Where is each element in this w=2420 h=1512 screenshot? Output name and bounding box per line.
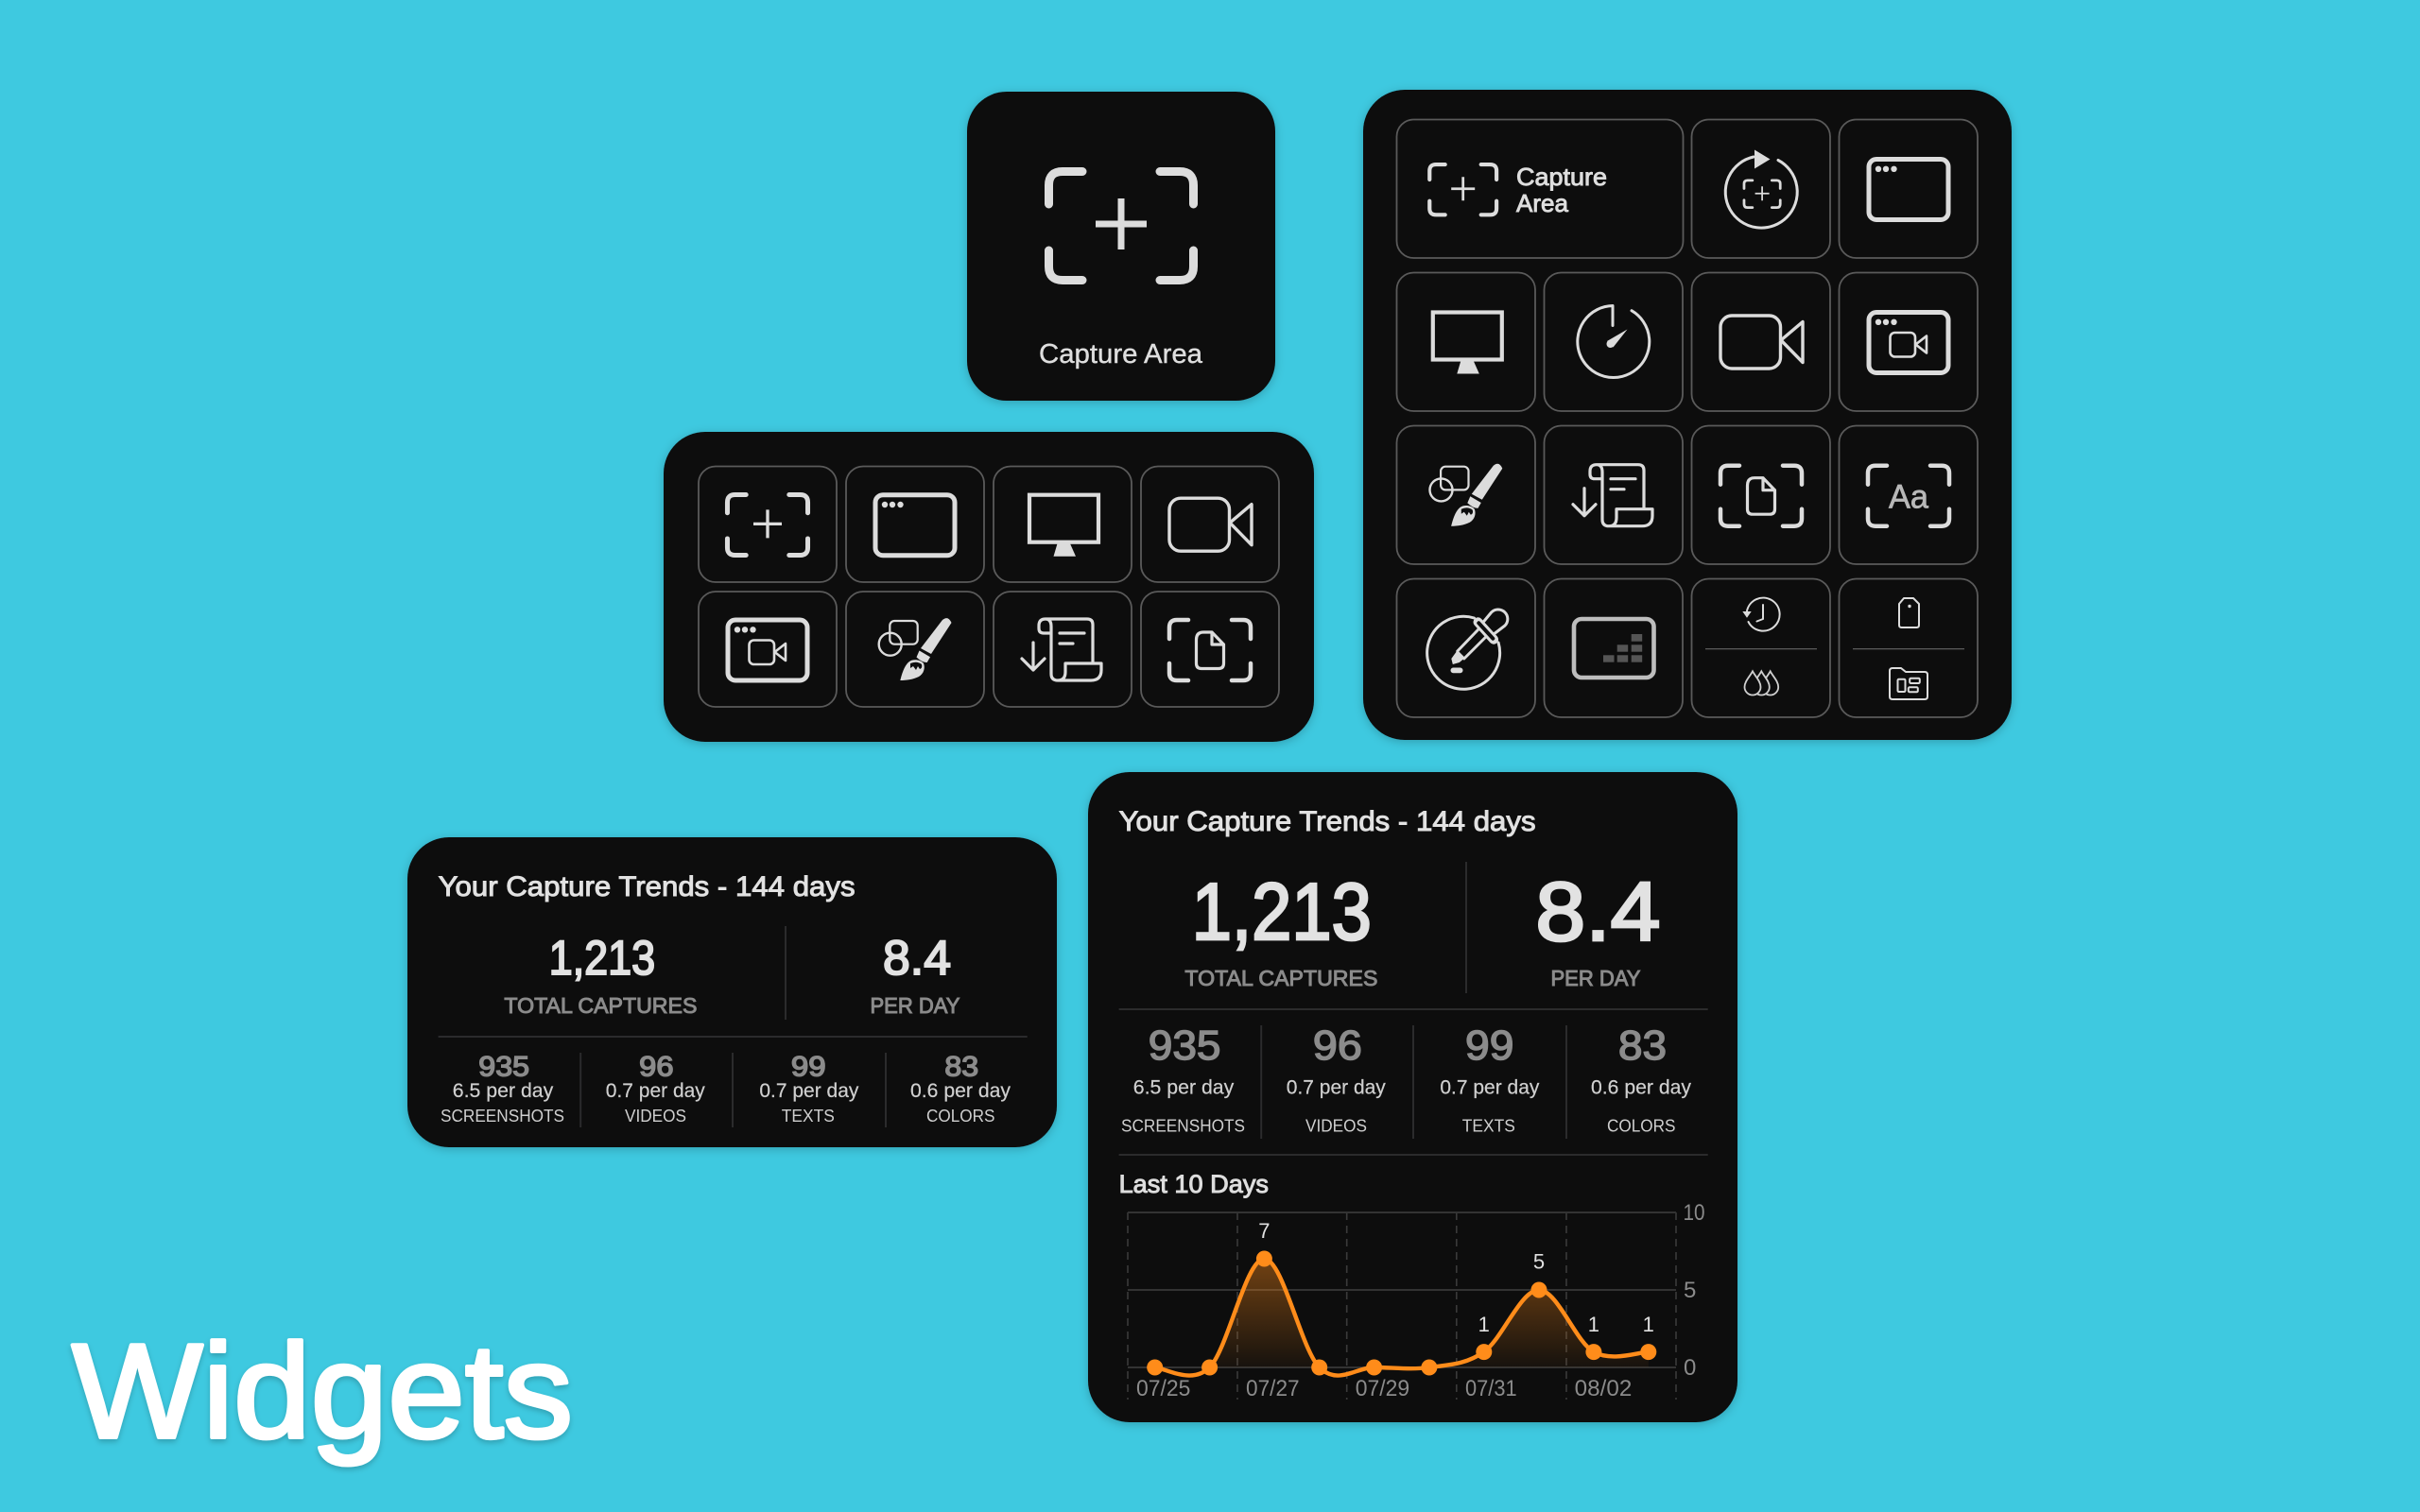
stat: videos: VIDEOS (1305, 1117, 1367, 1136)
panel background (1088, 772, 1737, 1422)
button: color picker (1397, 578, 1535, 717)
line chart: last 10 days (1128, 1200, 1705, 1401)
stat: per day: PER DAY (1550, 966, 1641, 990)
stat: colors: 83 (944, 1051, 978, 1083)
stat: videos: VIDEOS (625, 1107, 686, 1125)
x axis labels (1136, 1376, 1632, 1401)
button: timer (1545, 272, 1683, 411)
x axis labels: 07/27 (1246, 1376, 1300, 1401)
button: stats widget (1545, 578, 1683, 717)
stat: screenshots: 6.5 per day (1133, 1077, 1235, 1098)
stat: colors: 83 (1618, 1022, 1667, 1069)
button: window (846, 467, 984, 582)
button: history and drops split (1692, 578, 1830, 717)
value labels: 1 (1478, 1313, 1490, 1336)
stat: colors (1591, 1022, 1691, 1136)
icon: capture area (1049, 172, 1193, 280)
button: capture text: Aa (1889, 479, 1929, 516)
area fill (1216, 1264, 1649, 1366)
stat: texts: 99 (1465, 1022, 1513, 1069)
stat: colors: COLORS (926, 1107, 994, 1125)
button: scrolling capture (1545, 425, 1683, 564)
y axis labels: 5 (1684, 1278, 1696, 1303)
stat: total captures (504, 931, 697, 1018)
value labels (1258, 1219, 1654, 1336)
stat: per day: 8.4 (883, 931, 951, 985)
stat: per day: PER DAY (870, 993, 960, 1018)
title: Widgets: Widgets (72, 1316, 573, 1467)
stat: texts (759, 1051, 859, 1125)
stat: videos (1287, 1022, 1386, 1136)
stat: colors: COLORS (1607, 1117, 1675, 1136)
panel: sixteen button widget (1363, 90, 2012, 740)
button: window (1840, 119, 1978, 258)
heading: Your Capture Trends - 144 days (1119, 806, 1536, 837)
x axis labels: 07/31 (1465, 1376, 1517, 1401)
button: full screen (994, 467, 1132, 582)
button: annotate brush (1397, 425, 1535, 564)
value labels: 1 (1588, 1313, 1599, 1336)
stat: screenshots (1121, 1022, 1245, 1136)
stat: videos: 0.7 per day (606, 1080, 705, 1102)
data points (1147, 1251, 1656, 1376)
stat: videos: 96 (1313, 1022, 1362, 1069)
stat: per day (870, 931, 960, 1018)
y axis labels (1683, 1200, 1705, 1381)
x axis labels: 07/25 (1136, 1376, 1190, 1401)
stat: texts: 0.7 per day (1440, 1077, 1540, 1098)
stat: total captures (1184, 868, 1377, 990)
value labels: 7 (1258, 1219, 1270, 1243)
stat: colors: 0.6 per day (910, 1080, 1011, 1102)
stat: texts: 0.7 per day (759, 1080, 859, 1102)
stat: total captures: TOTAL CAPTURES (504, 993, 697, 1018)
button: capture text (1840, 425, 1978, 564)
button: record video (1141, 467, 1279, 582)
y axis labels: 10 (1683, 1200, 1705, 1226)
panel: eight button widget (664, 432, 1314, 742)
heading: last 10 days: Last 10 Days (1119, 1170, 1269, 1198)
y axis labels: 0 (1684, 1355, 1696, 1381)
data line (1155, 1259, 1649, 1376)
stat: videos (606, 1051, 705, 1125)
stat: colors (910, 1051, 1011, 1125)
button: record window (699, 592, 837, 707)
stat: texts (1440, 1022, 1540, 1136)
button: capture area wide (1397, 119, 1683, 258)
x axis labels: 08/02 (1575, 1376, 1632, 1401)
stat: total captures: 1,213 (1192, 868, 1372, 957)
value labels: 5 (1533, 1250, 1545, 1274)
panel background (1363, 90, 2012, 740)
button: annotate brush (846, 592, 984, 707)
panel: medium capture trends widget (407, 837, 1057, 1147)
button: scrolling capture (994, 592, 1132, 707)
button: capture document (1692, 425, 1830, 564)
panel background (664, 432, 1314, 742)
stat: videos: 0.7 per day (1287, 1077, 1386, 1098)
heading: Your Capture Trends - 144 days (439, 871, 856, 902)
x axis labels: 07/29 (1356, 1376, 1409, 1401)
panel: large capture trends widget (1088, 772, 1737, 1422)
stat: videos: 96 (639, 1051, 673, 1083)
stat: total captures: 1,213 (549, 931, 655, 985)
stat: screenshots: SCREENSHOTS (1121, 1117, 1245, 1136)
panel background (407, 837, 1057, 1147)
stat: total captures: TOTAL CAPTURES (1184, 966, 1377, 990)
label: capture area: Capture Area (1039, 339, 1203, 369)
stat: screenshots (441, 1051, 564, 1125)
panel background (967, 92, 1275, 401)
button: tag and folder split (1840, 578, 1978, 717)
button: full screen (1397, 272, 1535, 411)
stat: per day (1535, 865, 1660, 990)
button: record video (1692, 272, 1830, 411)
stat: texts: 99 (791, 1051, 826, 1083)
stat: screenshots: 935 (478, 1051, 529, 1083)
stat: per day: 8.4 (1535, 865, 1660, 958)
button: capture area wide: Area (1516, 189, 1569, 217)
value labels: 1 (1643, 1313, 1654, 1336)
button: capture document (1141, 592, 1279, 707)
button: capture area wide: Capture (1516, 163, 1607, 191)
stat: texts: TEXTS (1462, 1117, 1515, 1136)
stat: screenshots: 6.5 per day (453, 1080, 554, 1102)
stat: colors: 0.6 per day (1591, 1077, 1691, 1098)
button: record window (1840, 272, 1978, 411)
stat: screenshots: SCREENSHOTS (441, 1107, 564, 1125)
button: capture area (699, 467, 837, 582)
stat: texts: TEXTS (782, 1107, 835, 1125)
button: repeat capture (1692, 119, 1830, 258)
stat: screenshots: 935 (1149, 1022, 1221, 1069)
panel: small capture area widget (967, 92, 1275, 401)
